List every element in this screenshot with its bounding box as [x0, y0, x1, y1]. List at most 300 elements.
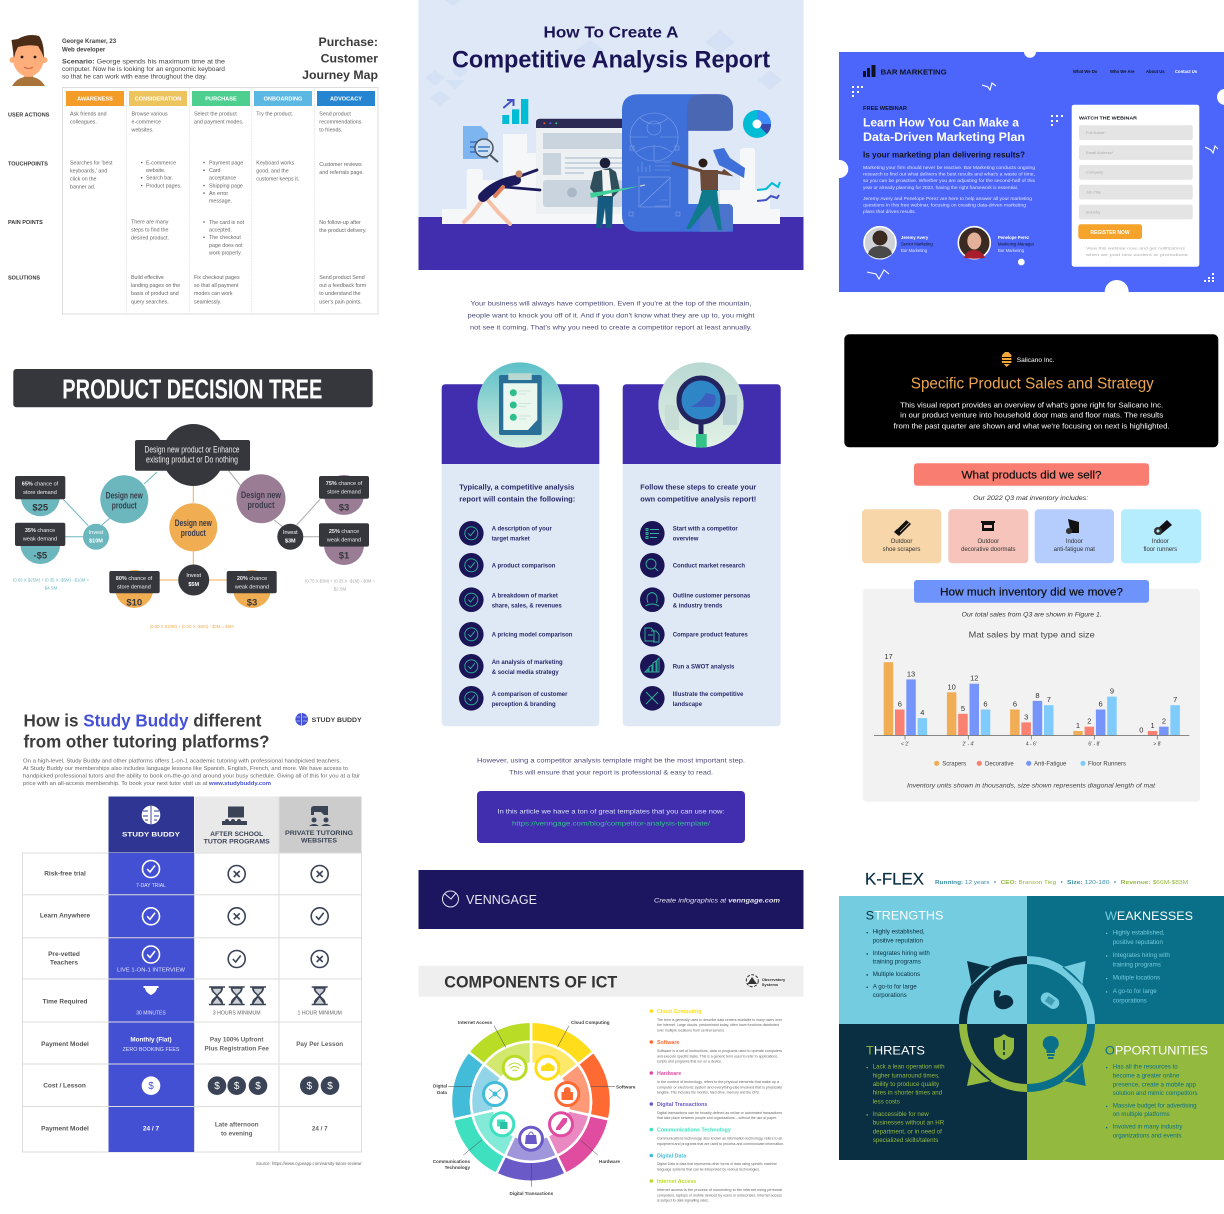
icons: cost dollar circles: [142, 1076, 339, 1095]
report header: from the past quarter are shown and what we're focusing on next is highlighted.: [894, 421, 1170, 430]
speaker: Penelope Perez: Bar Marketing: [998, 248, 1025, 253]
comparison intro paragraph: handpicked professional tutors and the ability to book on-the-go and around your busy schedule. Giving all of this for you at a fair: [23, 774, 360, 780]
step text: Conduct market research: [673, 564, 745, 570]
ICT legend headings: Software: [657, 1040, 679, 1046]
threats list: department, or in need of: [873, 1128, 942, 1135]
outcome probability text: 80% chance of: [116, 576, 153, 582]
bar chart: 1: [1076, 721, 1080, 730]
strengths list: Integrates hiring with: [873, 950, 930, 957]
competitor cell text: 24 / 7: [312, 1126, 328, 1133]
journey table cell text: good, and the: [256, 168, 289, 174]
journey table cell text: Fix checkout pages: [194, 275, 240, 281]
panel: contents of a competitive analysis report: [442, 362, 599, 726]
journey stage headers: ADVOCACY: [330, 96, 362, 102]
persona text: Scenario: George spends his maximum time at the: [62, 58, 226, 65]
bar chart: 6: [898, 700, 902, 708]
competitor cell text: Plus Registration Fee: [205, 1046, 269, 1053]
figure: woman with pen: [590, 158, 645, 228]
ICT legend bullets: [650, 1009, 653, 1183]
journey table cell text: customer keeps it.: [256, 176, 299, 182]
webinar body copy: so you can be proactive. Whether you are adjusting for the second-half of this: [863, 178, 1036, 183]
hero intro text: people want to knock you off of it. And if you don't know what they are up to, you might: [468, 312, 755, 320]
figure: man pushing: [464, 170, 540, 224]
ICT legend descriptions: [657, 1017, 784, 1202]
row labels: Learn Anywhere: [40, 913, 91, 920]
journey table cell text: Customer reviews: [319, 162, 362, 168]
journey table cell text: recommendations: [319, 120, 362, 126]
pulse decorations: [867, 83, 1218, 279]
invest nodes: $10M: [89, 538, 103, 544]
journey table cell text: out a feedback form: [319, 283, 367, 289]
outcome probability text: weak demand: [326, 538, 361, 544]
weaknesses list: corporations: [1113, 997, 1147, 1004]
persona text: George Kramer, 23: [62, 38, 117, 45]
step text: Outline customer personas: [673, 593, 751, 599]
observatory logo: [746, 975, 786, 987]
comparison intro paragraph: On a high-level, Study Buddy and other platforms offers 1-on-1 academic tutoring with professional handpicked teachers.: [23, 758, 341, 764]
icon: donut chart: [743, 110, 771, 138]
journey table cell text: No follow-up after: [319, 220, 361, 226]
outcome semicircles: [20, 475, 364, 608]
column header: private tutoring: PRIVATE TUTORING: [285, 830, 353, 837]
chart legend: Anti-Fatigue: [1034, 762, 1067, 768]
journey table cell text: The checkout: [209, 235, 241, 241]
wheel labels: Communications: [433, 1159, 470, 1164]
study buddy cell captions: Monthly (Flat): [130, 1036, 172, 1043]
journey table cell text: click on the: [70, 176, 97, 182]
icon: partial hourglass: [144, 986, 158, 995]
journey table cell text: steps to find the: [131, 228, 168, 234]
expected value formulas: $2.5M: [334, 586, 347, 592]
bar chart: 6: [1013, 700, 1017, 708]
strengths list: positive reputation: [873, 938, 923, 945]
ICT legend descriptions: the Internet. Large clouds, predominant today, often have functions distributed: [657, 1022, 779, 1027]
root decision node: existing product or Do nothing: [146, 455, 238, 465]
card background: [623, 384, 781, 726]
panel: competitive analysis hero: [418, 0, 804, 332]
bar chart: 12: [970, 674, 978, 683]
bar chart: 9: [1110, 687, 1114, 696]
ICT legend descriptions: is subject to data signalling rates.: [657, 1198, 709, 1202]
weaknesses list: Integrates hiring with: [1113, 952, 1170, 959]
persona text: computer. Now he is looking for an ergonomic keyboard: [62, 66, 225, 73]
journey row labels: SOLUTIONS: [8, 276, 40, 282]
footer tagline: Create infographics at venngage.com: [654, 898, 780, 904]
ICT legend descriptions: Software is a set of instructions, data or programs used to operate computers: [657, 1048, 782, 1053]
decision tree title: PRODUCT DECISION TREE: [62, 373, 322, 404]
bar chart: 6: [1099, 700, 1103, 708]
column header: study buddy: STUDY BUDDY: [122, 832, 181, 839]
competitor cell text: to evening: [221, 1130, 253, 1137]
comparison title: from other tutoring platforms?: [24, 732, 270, 752]
navigation: About Us: [1146, 69, 1165, 74]
speaker: Penelope Perez: Marketing Manager: [998, 242, 1035, 247]
strengths list: Multiple locations: [873, 971, 920, 978]
closing text: [477, 757, 745, 776]
journey row labels: TOUCHPOINTS: [8, 162, 48, 168]
competitor cell text: Pay 100% Upfront: [210, 1036, 264, 1043]
venngage wordmark: VENNGAGE: [466, 892, 537, 907]
checklist text: A product comparison: [492, 564, 556, 570]
root decision node: [135, 424, 250, 486]
outcome boxes: [15, 476, 369, 593]
outcome probability text: store demand: [117, 584, 151, 590]
journey table cell text: query searches.: [131, 300, 169, 306]
journey stage headers: CONSIDERATION: [135, 96, 181, 102]
comparison title: [24, 710, 270, 752]
threats list: Lack a lean operation with: [873, 1064, 945, 1071]
checklist text: A comparison of customer: [492, 692, 568, 698]
journey table cell text: e-commerce: [132, 120, 161, 126]
panel: steps to create a competitive analysis report: [623, 362, 781, 726]
outcome probability text: 25% chance: [329, 529, 359, 535]
panel: study buddy comparison: [22, 710, 362, 1166]
registration form: [1072, 105, 1199, 267]
step text: [673, 527, 751, 708]
ICT legend descriptions: scripts and programs that run on a device.: [657, 1059, 722, 1064]
bar chart: 1: [1151, 721, 1155, 730]
browser window illustration: [536, 119, 626, 214]
checklist text: perception & branding: [492, 702, 556, 708]
registration form: when we post new content or promotions.: [1086, 252, 1189, 257]
study buddy logo: STUDY BUDDY: [312, 718, 362, 724]
journey row labels: PAIN POINTS: [8, 220, 43, 226]
outcome probability text: 65% chance of: [22, 482, 59, 488]
competitor cell text: 3 HOURS MINIMUM: [213, 1010, 261, 1016]
skyline blocks: [442, 134, 780, 224]
checklist text: An analysis of marketing: [492, 660, 563, 666]
invest nodes: Invest: [89, 530, 104, 536]
opportunities heading: OPPORTUNITIES: [1105, 1045, 1208, 1057]
webinar body copy: research to find out what delivers the best results and what's a waste of time,: [863, 172, 1035, 176]
competitor cell text: [205, 1010, 343, 1137]
checklist text: A pricing model comparison: [492, 633, 573, 639]
journey table cell text: work properly.: [209, 250, 242, 256]
icon: avatar of George: [10, 35, 48, 86]
bar chart: 10: [948, 682, 956, 691]
branch nodes: product: [112, 500, 137, 511]
chart legend: Decorative: [985, 762, 1014, 768]
panel: mat sales report: [844, 334, 1218, 802]
chart panel background: [863, 589, 1200, 802]
section heading: inventory moved: [914, 580, 1149, 603]
bar chart: < 2': [901, 742, 909, 748]
threats list: higher turnaround times,: [873, 1072, 940, 1079]
column header: private tutoring: WEBSITES: [301, 838, 337, 845]
step text: landscape: [673, 702, 703, 708]
logo: bar marketing: [863, 65, 947, 77]
connector lines: [63, 470, 320, 580]
step text: Compare product features: [673, 633, 748, 639]
bar chart: 17: [884, 652, 893, 661]
panel: components of ICT: [418, 966, 804, 1202]
report header: Salicano Inc.: [1017, 357, 1055, 364]
row labels: Pre-vetted: [48, 951, 80, 958]
journey table cell text: Payment page: [209, 160, 243, 166]
opportunities list: Involved in many industry: [1113, 1124, 1183, 1131]
outcome values: -$5: [33, 550, 48, 562]
figure: bearded man: [672, 148, 745, 230]
registration form: Job Title: [1086, 190, 1102, 194]
checklist text: & social media strategy: [492, 670, 559, 676]
threats list: [866, 1064, 945, 1144]
strengths list: training programs: [873, 959, 921, 966]
strengths list: corporations: [873, 992, 907, 999]
study buddy logo: [295, 713, 362, 726]
section heading: what products: What products did we sell?: [962, 470, 1102, 482]
persona text: [62, 38, 226, 80]
ICT legend descriptions: tangible. This includes the monitor, hard drive, memory and the CPU.: [657, 1090, 760, 1095]
journey table cell text: seamlessly.: [194, 300, 221, 306]
ICT legend descriptions: and execute specific tasks. This is a generic term used to refer to applications,: [657, 1053, 778, 1058]
webinar heading: Data-Driven Marketing Plan: [863, 130, 1025, 144]
journey table cell text: Keyboard works: [256, 160, 295, 166]
decision tree title: [13, 369, 373, 407]
comparison table columns: [22, 796, 362, 1152]
outcome values: $3: [339, 502, 349, 514]
navigation: Who We Are: [1110, 69, 1135, 74]
threats list: less costs: [873, 1098, 900, 1105]
expected value formulas: [13, 578, 375, 629]
step text: Run a SWOT analysis: [673, 665, 735, 671]
expected value formulas: (0.75 X $3M) + (0.25 X -$1M) - $0M =: [305, 578, 375, 584]
card heading: Typically, a competitive analysis: [459, 484, 574, 491]
journey table cell text: modes can work: [194, 291, 233, 297]
threats list: businesses without an HR: [873, 1120, 945, 1127]
bar chart: 7: [1173, 695, 1177, 704]
bar chart: 8: [1035, 691, 1040, 700]
comparison intro paragraph: price with an all-access membership. To book your next tutor visit us at www.studybuddy.com: [23, 781, 271, 787]
ICT legend descriptions: computer or electronic system and everything else involved that is physically: [657, 1084, 782, 1090]
competitor cell text: Late afternoon: [215, 1122, 259, 1129]
webinar body copy: Jeremy Avery and Penelope Perez are here to help answer all your marketing: [863, 196, 1033, 201]
wheel labels: Internet Access: [458, 1020, 492, 1025]
journey table cell text: banner ad.: [70, 184, 95, 190]
wheel labels: Digital Transactions: [509, 1191, 554, 1196]
opportunities list: Massive budget for advertising: [1113, 1102, 1197, 1109]
speaker: Penelope Perez: [958, 227, 1035, 259]
ICT legend descriptions: Digital transactions can be broadly defined as online or automated transactions: [657, 1110, 782, 1115]
hero intro text: [468, 300, 755, 332]
SWOT compass ring: [959, 956, 1095, 1092]
threats list: hires in shorter times and: [873, 1090, 943, 1097]
panel: K-FLEX SWOT: [839, 870, 1224, 1160]
journey stage headers: AWARENESS: [77, 96, 113, 102]
column header: after school: TUTOR PROGRAMS: [204, 839, 270, 846]
comparison title: How is Study Buddy different: [24, 710, 262, 730]
journey table cell text: acceptance: [209, 176, 236, 182]
webinar heading: Is your marketing plan delivering results?: [863, 150, 1025, 159]
comparison intro paragraph: [23, 758, 360, 787]
card heading: own competitive analysis report!: [640, 497, 756, 504]
icons: hourglasses: [209, 986, 328, 1005]
journey table cell text: Select the product: [194, 112, 237, 118]
company facts: Revenue: $66M-$83M: [1121, 880, 1189, 886]
bar chart: [874, 652, 1189, 748]
company facts: CEO: Branson Tieg: [1001, 880, 1056, 886]
template link box: https://venngage.com/blog/competitor-analysis-template/: [512, 821, 710, 828]
hero heading: Competitive Analysis Report: [452, 46, 770, 74]
ICT header bar: [418, 966, 804, 997]
branch nodes: product: [248, 500, 275, 511]
outcome probability text: weak demand: [22, 536, 57, 542]
report header: in our product venture into household door mats and floor mats. The results: [900, 411, 1164, 420]
hero heading: How To Create A: [544, 24, 679, 42]
bar chart: 6' - 8': [1088, 742, 1100, 748]
step text: overview: [673, 537, 699, 543]
ICT title: COMPONENTS OF ICT: [444, 972, 618, 991]
product tiles: anti-fatigue mat: [1054, 547, 1095, 553]
ICT legend headings: Internet Access: [657, 1179, 696, 1185]
navigation: What We Do: [1073, 69, 1098, 74]
checklist text: A breakdown of market: [492, 593, 558, 599]
ICT legend headings: Hardware: [657, 1071, 681, 1077]
outcome values: $10: [126, 598, 142, 608]
bar chart: 4: [920, 708, 924, 717]
journey table cell text: landing pages on the: [131, 283, 180, 289]
outcome probability text: 20% chance: [237, 576, 267, 582]
product tiles: shoe scrapers: [883, 547, 920, 553]
study buddy cell captions: LIVE 1-ON-1 INTERVIEW: [117, 968, 185, 974]
journey table cell text: E-commerce: [146, 160, 176, 166]
bar chart: > 8': [1153, 742, 1161, 748]
navigation: Contact Us: [1175, 69, 1198, 74]
registration form: View this webinar now, and get notifications: [1086, 246, 1185, 250]
weaknesses heading: WEAKNESSES: [1105, 911, 1193, 923]
threats list: specialized skills/talents: [873, 1137, 938, 1144]
webinar heading: FREE WEBINAR: [863, 106, 907, 112]
outcome values: [32, 502, 350, 608]
navigation: [1073, 69, 1198, 74]
journey table cell text: There are many: [131, 220, 169, 226]
webinar body copy: [863, 165, 1036, 214]
wheel labels: Data: [437, 1090, 447, 1095]
icon: document and magnifier: [463, 126, 498, 162]
journey table cell text: Send product: [319, 112, 351, 118]
ICT legend headings: [657, 1009, 731, 1185]
product tiles: decorative doormats: [961, 547, 1015, 553]
weaknesses list: training programs: [1113, 962, 1161, 969]
row labels: Risk-free trial: [44, 871, 86, 878]
journey table cell text: and referrals page.: [319, 170, 364, 176]
bar chart: 7: [1047, 695, 1051, 704]
journey table cell text: and payment modes.: [194, 120, 243, 126]
hero intro text: Your business will always have competition. Even if you're at the top of the mountain,: [470, 300, 752, 308]
logo: bar marketing: BAR MARKETING: [881, 70, 947, 76]
illustration: clipboard checklist: [477, 362, 563, 448]
ICT legend descriptions: computers, laptops or mobile devices by users or enterprises. Internet access: [657, 1192, 782, 1197]
column header: after school: AFTER SCHOOL: [210, 831, 263, 838]
branch nodes: [100, 474, 286, 551]
wheel labels: Technology: [445, 1165, 470, 1170]
closing text: However, using a competitor analysis template might be the most important step.: [477, 757, 745, 764]
chart footnote: Inventory units shown in thousands, size shown represents diagonal length of mat: [907, 784, 1155, 790]
bar chart: 0: [1139, 725, 1143, 734]
footer background: [418, 870, 804, 929]
checklist icons: [459, 521, 484, 711]
study buddy cell captions: 30 MINUTES: [136, 1010, 166, 1016]
icon: rising bars: [502, 99, 528, 124]
report header: This visual report provides an overview of what's gone right for Salicano Inc.: [900, 400, 1163, 409]
ICT legend descriptions: language systems that can be interpreted by various technologies.: [657, 1166, 760, 1172]
journey table cell text: The card is not: [209, 220, 245, 226]
chart legend: Floor Runners: [1088, 762, 1126, 768]
section heading: what products: [914, 463, 1149, 486]
outcome probability text: store demand: [23, 490, 57, 496]
template link box: In this article we have a ton of great templates that you can use now:: [498, 808, 725, 816]
weaknesses list: Multiple locations: [1113, 975, 1160, 982]
row labels: Cost / Lesson: [43, 1082, 86, 1089]
panel: bar marketing webinar: [830, 46, 1224, 304]
wheel labels: Cloud Computing: [571, 1020, 610, 1025]
checklist text: target market: [492, 537, 530, 543]
expected value formulas: (0.65 X $25M) + (0.35 X -$5M) - $10M =: [13, 578, 89, 582]
strengths heading: STRENGTHS: [866, 910, 944, 922]
closing text: This will ensure that your report is professional & easy to read.: [509, 770, 713, 776]
journey table cell text: Send product Send: [319, 275, 365, 281]
webinar body copy: Marketing your firm should never be reactive. Bar Marketing conducts ongoing: [863, 165, 1036, 170]
bar chart: 6: [983, 700, 988, 708]
product tiles: Outdoor: [891, 539, 912, 545]
journey table cell text: Card: [209, 168, 221, 174]
journey table cell text: message.: [209, 198, 232, 204]
wheel labels: Hardware: [599, 1159, 620, 1164]
study buddy cell captions: 7-DAY TRIAL: [136, 883, 166, 889]
step text: & industry trends: [673, 603, 723, 609]
chart notes: Our total sales from Q3 are shown in Figure 1.: [962, 612, 1102, 619]
study buddy check marks: [142, 860, 160, 963]
competitor check and cross marks: [228, 866, 328, 968]
webinar heading: [863, 106, 1025, 159]
ICT legend headings: Digital Data: [657, 1153, 686, 1159]
journey table cell text: so that all payment: [194, 283, 239, 289]
study buddy cell captions: 24 / 7: [143, 1126, 160, 1133]
webinar body copy: questions in this free webinar, focusing on creating data-driven marketing: [863, 202, 1027, 208]
outcome values: $1: [339, 550, 350, 562]
hero heading: [452, 24, 770, 74]
ICT wheel chart: [451, 1022, 611, 1182]
opportunities list: presence, create a mobile app: [1113, 1081, 1196, 1088]
branch nodes: product: [181, 528, 206, 539]
ICT legend headings: Cloud Computing: [657, 1009, 701, 1015]
opportunities list: Has all the resources to: [1113, 1064, 1178, 1071]
panel: customer journey map: [8, 35, 378, 314]
speaker: Jeremy Avery: Senior Marketing: [901, 242, 933, 247]
report header: Specific Product Sales and Strategy: [911, 376, 1154, 392]
column header: after school: [204, 806, 270, 846]
outcome probability text: weak demand: [234, 584, 269, 590]
ICT legend descriptions: equipment and programs that are used to process and communicate information.: [657, 1141, 784, 1146]
invest nodes: Invest: [186, 573, 202, 579]
strengths list: [866, 929, 930, 999]
ICT legend descriptions: Internet access is the process of connecting to the internet using personal: [657, 1187, 782, 1192]
opportunities list: become a greater online: [1113, 1073, 1180, 1080]
journey table cell text: [70, 112, 367, 306]
card heading: [459, 484, 575, 504]
persona text: Web developer: [62, 46, 106, 54]
invest nodes: [83, 524, 303, 596]
source note: Source: https://www.cypeapp.com/varsity-tutors-review/: [256, 1161, 362, 1166]
persona text: so that he can work with ease throughout the day.: [62, 74, 207, 80]
hero background: [418, 0, 804, 270]
ICT legend headings: Communications Technology: [657, 1127, 731, 1133]
bar chart: 5: [961, 704, 965, 713]
journey table cell text: to friends.: [319, 128, 343, 134]
company facts: Size: 120-180: [1067, 880, 1110, 886]
journey table cell text: the product delivery.: [319, 228, 367, 234]
icon: shield: [994, 1034, 1014, 1060]
title: Purchase Customer Journey Map: Journey Map: [302, 68, 378, 82]
